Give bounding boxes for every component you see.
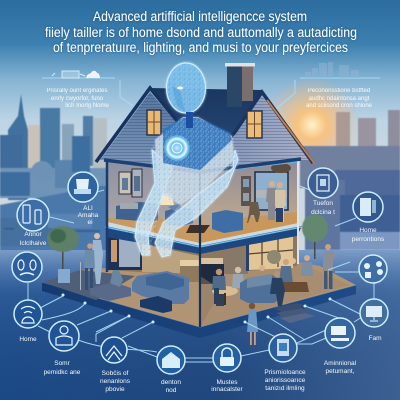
badge labels: Annor — [24, 231, 43, 238]
left forearm — [135, 150, 172, 255]
title — [45, 9, 357, 55]
chest — [163, 118, 232, 170]
head speckle — [167, 64, 205, 112]
front gable right — [204, 94, 310, 170]
badge labels: dclcina t — [311, 209, 335, 216]
annotation: upper left text: Prisrally ount erginates — [46, 88, 108, 94]
house roof — [96, 88, 314, 172]
connector end dots — [62, 294, 332, 324]
inner ring — [172, 143, 182, 153]
badge: person — [49, 321, 79, 351]
badge labels: aniorissoarıce — [265, 377, 306, 384]
lower floor — [42, 232, 356, 327]
top right skyline icon — [305, 62, 359, 78]
face shadow — [172, 86, 185, 112]
living room window — [255, 172, 288, 222]
badge: monitor — [325, 318, 355, 348]
ceiling lamp — [271, 163, 291, 173]
sofa upper middle — [165, 204, 193, 227]
center post shadow — [200, 276, 222, 327]
AI figure — [135, 63, 238, 257]
badge: tablet — [269, 334, 297, 362]
badge labels: denton — [161, 379, 181, 386]
badge: screen — [360, 299, 388, 327]
neck core — [186, 112, 193, 128]
annotation: upper right text: Pecononsstione bstfted — [308, 88, 370, 94]
badge: phone grid — [308, 168, 338, 198]
chair — [247, 202, 260, 223]
badge labels: Tuefon — [313, 200, 333, 207]
badge: nodes — [359, 255, 387, 283]
annotation: upper left text: enrly cwyorfor, funo — [51, 96, 104, 102]
right gable siding lines — [204, 94, 310, 170]
annotation: upper right text — [306, 88, 373, 109]
left gable siding lines — [100, 92, 200, 172]
roof main — [150, 88, 262, 172]
badge: home wifi — [14, 300, 42, 328]
sofa right — [240, 271, 285, 306]
wooden table — [186, 225, 210, 233]
badge labels: pemidkc ane — [44, 369, 81, 376]
chest core — [164, 135, 190, 161]
kitchen counter — [180, 258, 224, 284]
title: Advanced artifficial intelligencce system — [93, 9, 307, 24]
speckle overlay — [135, 117, 238, 257]
title: fiiely tailler is of home dsond and auttomally a autadicting — [45, 25, 357, 40]
right floor warm — [200, 262, 350, 327]
city skyline: left — [0, 94, 107, 258]
top left annotation icons — [52, 71, 100, 78]
badge labels: Sobčis of — [102, 370, 129, 377]
left windows — [108, 234, 142, 270]
badge labels: pbovie — [105, 386, 125, 393]
badge: document device — [68, 172, 98, 202]
badge labels: Amaha — [78, 212, 99, 219]
badge labels: Fam — [368, 335, 382, 342]
woman in blue dress — [247, 303, 258, 345]
foot ground plane — [0, 250, 400, 400]
left room — [108, 162, 200, 243]
front gable left — [100, 92, 200, 172]
badge labels: petumant, — [326, 368, 355, 375]
badge: house — [157, 346, 185, 374]
badge labels: ALI — [83, 205, 93, 212]
badge: annor — [17, 199, 49, 231]
badge labels: Aminnional — [324, 360, 357, 367]
badge labels: Mustes — [217, 379, 238, 386]
sofa left — [90, 270, 189, 313]
badge labels: Home — [19, 336, 37, 343]
picture frames — [119, 169, 142, 197]
floor — [42, 262, 356, 327]
badge: lock — [213, 344, 241, 372]
right room — [200, 162, 298, 243]
upper floor rooms — [108, 162, 298, 243]
badge labels: ei — [87, 219, 93, 226]
left tree — [47, 226, 79, 283]
icon badges — [12, 168, 388, 374]
kitchen wall — [142, 244, 200, 274]
left deck — [42, 270, 135, 300]
title: of tenpreratuıre, lighting, and musi to your preyfercices — [53, 40, 348, 55]
annotation: upper left text: Iich Inorlg Nome — [65, 103, 110, 109]
floor slab — [105, 158, 302, 327]
sofa upper left — [116, 202, 158, 222]
right tree — [302, 214, 328, 259]
left floor — [108, 218, 200, 243]
chimney — [225, 63, 255, 107]
badge labels: Home — [359, 227, 377, 234]
badge: face — [12, 252, 42, 282]
badge labels: nod — [166, 387, 177, 394]
connector network — [28, 78, 380, 362]
lamp — [160, 193, 174, 205]
badge: arrows up — [101, 337, 127, 363]
badge labels: nenanlons — [100, 378, 131, 385]
elderly couple — [80, 233, 103, 290]
torso — [155, 117, 234, 205]
badge labels — [19, 200, 385, 394]
outdoor figures and trees — [47, 214, 337, 290]
man outside right — [323, 244, 337, 289]
bookshelf — [241, 176, 251, 206]
badge labels: Prisrnioloance — [264, 369, 306, 376]
annotation: upper right text: audhc ndaintonsa angt — [309, 96, 370, 102]
badge labels: Iclclhaive — [20, 240, 47, 247]
badge labels: tanizıd ilmling — [265, 385, 305, 392]
badge labels: innacalster — [211, 386, 244, 393]
dining group — [212, 255, 313, 306]
right forearm — [155, 150, 238, 257]
eaves — [96, 88, 200, 170]
badge: panel device — [353, 192, 383, 222]
back wall — [107, 232, 297, 276]
badge labels: Somr — [54, 360, 71, 367]
warm dining windows — [224, 233, 293, 274]
stairs — [273, 303, 315, 323]
city skyline: right — [300, 110, 400, 250]
right floor — [200, 212, 298, 243]
annotation: upper left text — [46, 88, 110, 109]
badge labels: perrontions — [352, 236, 385, 243]
platform base — [42, 282, 356, 338]
sofa upper right — [212, 210, 243, 233]
head — [166, 63, 206, 113]
eye — [177, 87, 183, 89]
annotation: upper right text: and sciisond cron shlone — [306, 103, 373, 109]
attic windows — [147, 110, 262, 138]
